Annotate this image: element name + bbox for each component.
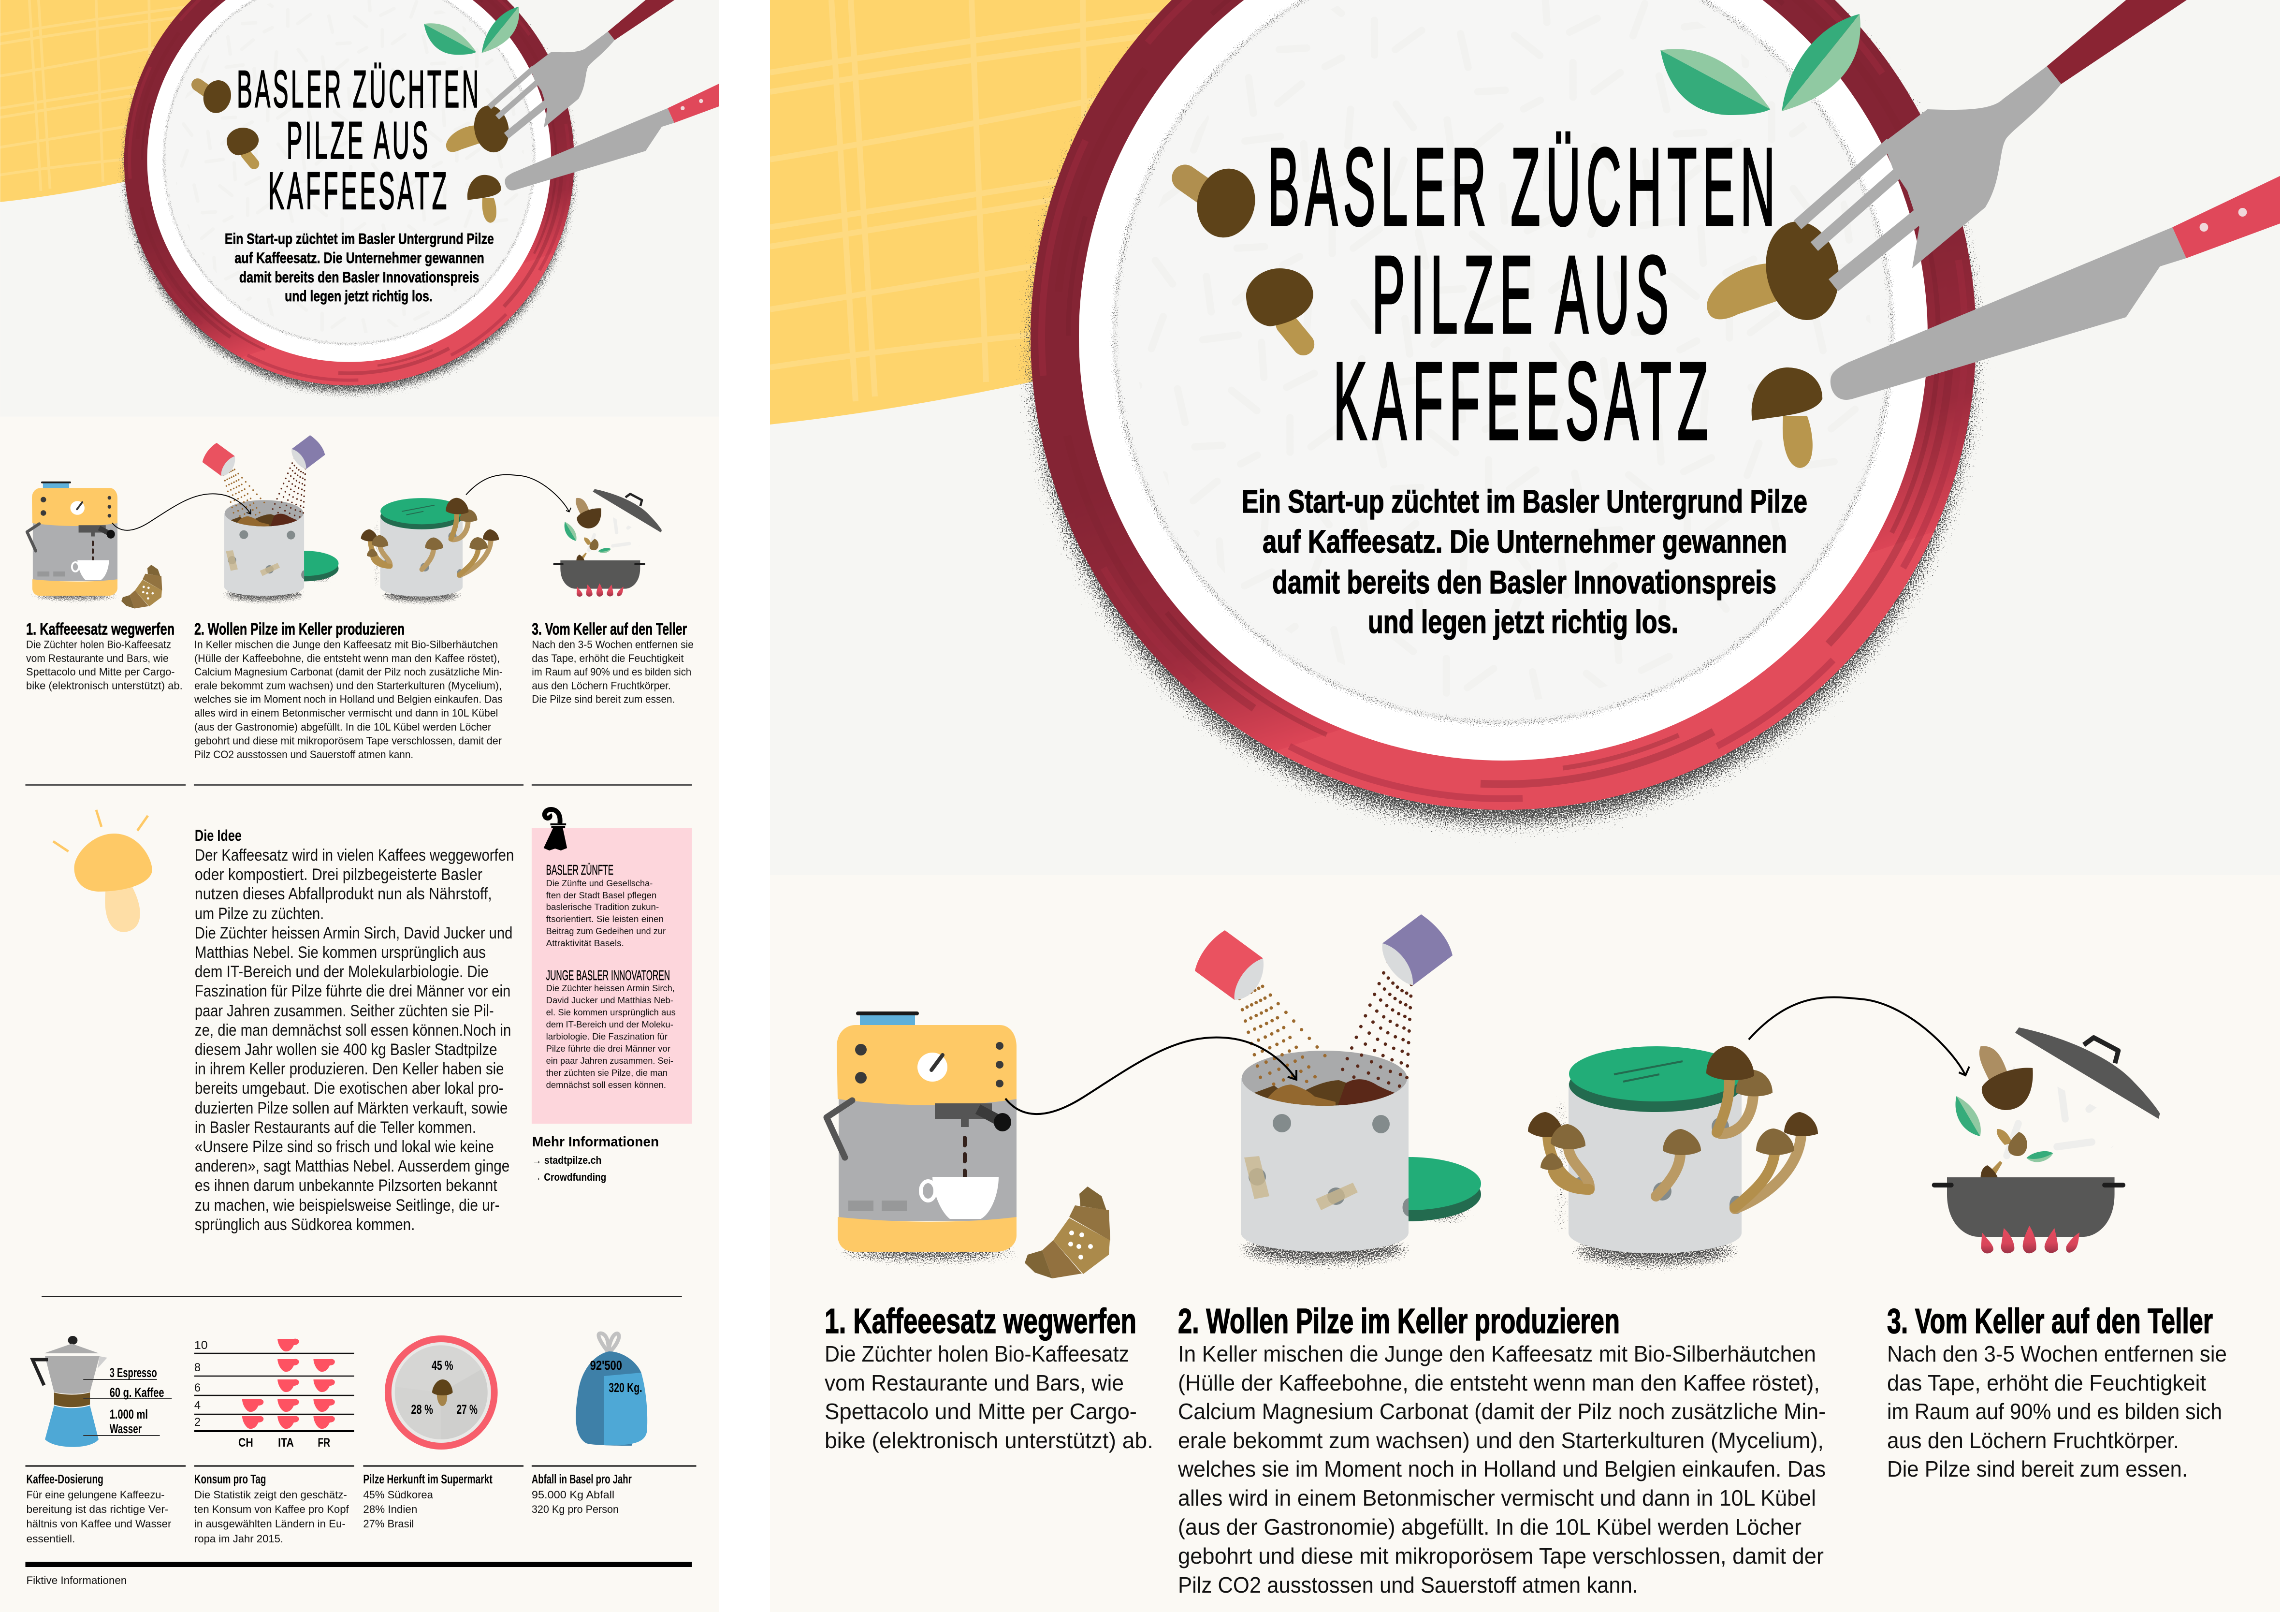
sidebar text: Junge Basler Innovatoren: ther züchten sie Pilze, die man (546, 1068, 668, 1078)
text block: Die Idee: anderen», sagt Matthias Nebel. Ausserdem ginge (195, 1157, 509, 1175)
text block: Die Idee: «Unsere Pilze sind so frisch und lokal wie keine (195, 1138, 494, 1156)
text block: Die Idee: nutzen dieses Abfallprodukt nun als Nährstoff, (195, 885, 492, 903)
statistics captions: ten Konsum von Kaffee pro Kopf (194, 1503, 349, 1515)
statistics captions: Konsum pro Tag (194, 1473, 266, 1486)
step 1 text: Spettacolo und Mitte per Cargo- (825, 1399, 1137, 1424)
step 2 text: In Keller mischen die Junge den Kaffeesatz mit Bio-Silberhäutchen (1178, 1341, 1816, 1366)
title (1267, 126, 1781, 463)
intro text: auf Kaffeesatz. Die Unternehmer gewannen (234, 249, 484, 266)
step 2 text: (Hülle der Kaffeebohne, die entsteht wenn man den Kaffee röstet), (1178, 1370, 1820, 1395)
links: Mehr Informationen: → Crowdfunding (532, 1171, 606, 1183)
text block: Die Idee: dem IT-Bereich und der Molekularbiologie. Die (195, 963, 489, 981)
sidebar text: Basler Zünfte: Beitrag zum Gedeihen und zur (546, 926, 666, 936)
illustration: coffee machine (827, 1011, 1027, 1267)
links: Mehr Informationen (532, 1134, 659, 1183)
panel: left process illustrations and steps (26, 435, 694, 761)
intro text: damit bereits den Basler Innovationspreis (1272, 564, 1776, 601)
panel: left process illustrations and steps: 2. Wollen Pilze im Keller produzieren (194, 620, 405, 638)
panel: left process illustrations and steps: Spettacolo und Mitte per Cargo- (26, 666, 175, 678)
sidebar text: Junge Basler Innovatoren: el. Sie kommen ursprünglich aus (546, 1007, 676, 1017)
statistics captions: 27% Brasil (363, 1518, 414, 1530)
panel: hero (770, 0, 2296, 875)
statistics captions: 95.000 Kg Abfall (532, 1489, 614, 1501)
panel: left lower sections (25, 784, 696, 1586)
sidebar text: Junge Basler Innovatoren: dem IT-Bereich und der Moleku- (546, 1019, 673, 1029)
step 2 text: Pilz CO2 ausstossen und Sauerstoff atmen kann. (1178, 1572, 1638, 1597)
links: Mehr Informationen: → stadtpilze.ch (532, 1154, 601, 1166)
illustration: poured packets (1195, 914, 1453, 1000)
panel: left hero: BASLER ZÜCHTEN (237, 59, 481, 118)
panel: pink sidebar (532, 809, 692, 1124)
text block: Die Idee: paar Jahren zusammen. Seither züchten sie Pil- (195, 1002, 494, 1020)
intro text: auf Kaffeesatz. Die Unternehmer gewannen (1263, 524, 1787, 560)
chart: coffee consumption per day: 4 (194, 1399, 201, 1412)
step 2 text: Calcium Magnesium Carbonat (damit der Pilz noch zusätzliche Min- (1178, 1399, 1826, 1424)
title: PILZE AUS (1372, 234, 1674, 356)
chart: mushroom origin plate: 27 % (456, 1402, 478, 1417)
step 1 text: bike (elektronisch unterstützt) ab. (825, 1428, 1153, 1453)
step 3 text: Nach den 3-5 Wochen entfernen sie (1887, 1341, 2227, 1366)
statistics captions: bereitung ist das richtige Ver- (26, 1503, 168, 1515)
text block: Die Idee: Der Kaffeesatz wird in vielen Kaffees weggeworfen (195, 846, 514, 865)
chart: coffee consumption per day: 2 (194, 1416, 201, 1429)
text block: Die Idee: um Pilze zu züchten. (195, 905, 324, 923)
divider rules under steps (25, 784, 692, 786)
panel: left process illustrations and steps: Die Züchter holen Bio-Kaffeesatz (26, 638, 171, 650)
panel: left process illustrations and steps: vom Restaurante und Bars, wie (26, 652, 169, 664)
statistics captions: 320 Kg pro Person (532, 1503, 619, 1515)
statistics captions: Pilze Herkunft im Supermarkt (363, 1473, 493, 1486)
text block: Die Idee: oder kompostiert. Drei pilzbegeisterte Basler (195, 865, 482, 884)
step 3 text: im Raum auf 90% und es bilden sich (1887, 1399, 2222, 1424)
icon: mushroom 4 (1752, 367, 1822, 468)
step 3 text: aus den Löchern Fruchtkörper. (1887, 1428, 2179, 1453)
chart: coffee consumption per day: 10 (194, 1339, 208, 1352)
panel: left process illustrations and steps: Nach den 3-5 Wochen entfernen sie (532, 638, 694, 650)
illustration: bucket with mushrooms (1528, 1046, 1818, 1272)
intro text: Ein Start-up züchtet im Basler Untergrund Pilze (225, 230, 494, 248)
statistics captions: essentiell. (26, 1533, 75, 1545)
chart: waste bag: 320 Kg. (609, 1380, 642, 1395)
chart: waste bag: 92'500 (590, 1358, 622, 1373)
chart: coffee consumption per day: 6 (194, 1381, 201, 1394)
statistics captions: Abfall in Basel pro Jahr (532, 1473, 632, 1486)
illustration: croissant (1025, 1187, 1110, 1278)
step 1 text: vom Restaurante und Bars, wie (825, 1370, 1124, 1395)
panel: left process illustrations and steps: das Tape, erhöht die Feuchtigkeit (532, 652, 683, 664)
text block: Die Idee: es ihnen darum unbekannte Pilzsorten bekannt (195, 1176, 497, 1195)
sidebar text: Junge Basler Innovatoren: demnächst soll essen können. (546, 1080, 666, 1090)
text block: Die Idee (195, 827, 514, 1234)
step 2 text: welches sie im Moment noch in Holland und Belgien einkaufen. Das (1177, 1456, 1826, 1481)
chart: moka pot dosage: 1.000 ml (110, 1407, 148, 1421)
step 1 text (825, 1302, 1153, 1453)
text block: Die Idee: Die Züchter heissen Armin Sirch, David Jucker und (195, 924, 512, 942)
chart: mushroom origin plate (385, 1335, 498, 1450)
panel: left page overview (0, 0, 729, 1612)
left page paper (0, 0, 719, 1612)
illustration: open bucket with coffee grounds (1233, 1051, 1481, 1270)
chart: coffee consumption per day: ITA (278, 1436, 294, 1450)
panel: left process illustrations and steps: (Hülle der Kaffeebohne, die entsteht wenn man den Kaffee röstet), (194, 652, 500, 664)
intro text: Ein Start-up züchtet im Basler Untergrund Pilze (1242, 484, 1807, 520)
plate (1020, 0, 1987, 836)
text block: Die Idee: Die Idee (195, 827, 242, 844)
icon: fork (1798, 0, 2187, 285)
sidebar text: Junge Basler Innovatoren: JUNGE BASLER INNOVATOREN (546, 968, 670, 983)
statistics captions: in ausgewählten Ländern in Eu- (194, 1518, 346, 1530)
chart: waste bag (576, 1334, 647, 1446)
statistics captions: Die Statistik zeigt den geschätz- (194, 1489, 347, 1501)
intro text (1242, 484, 1807, 640)
chart: moka pot dosage: Wasser (110, 1421, 142, 1436)
text block: Die Idee: diesem Jahr wollen sie 400 kg Basler Stadtpilze (195, 1040, 497, 1059)
chart: moka pot dosage: 60 g. Kaffee (110, 1385, 164, 1400)
step 3 text (1887, 1302, 2227, 1481)
intro text: damit bereits den Basler Innovationspreis (239, 268, 479, 286)
panel: right page detail (770, 0, 2296, 1612)
panel: left process illustrations and steps: In Keller mischen die Junge den Kaffeesatz mit Bio-Silberhäutchen (194, 638, 498, 650)
chart: mushroom origin plate: 45 % (432, 1358, 453, 1373)
step 2 text: gebohrt und diese mit mikroporösem Tape verschlossen, damit der (1178, 1543, 1824, 1568)
sidebar text: Junge Basler Innovatoren: Pilze führte die drei Männer vor (546, 1043, 670, 1054)
sidebar text: Junge Basler Innovatoren: Die Züchter heissen Armin Sirch, (546, 983, 675, 993)
icon: mushroom on fork (1707, 215, 1847, 327)
statistics captions: ropa im Jahr 2015. (194, 1533, 283, 1545)
step 2 text (1177, 1302, 1826, 1597)
chart: coffee consumption per day: 8 (194, 1361, 201, 1374)
statistics captions: hältnis von Kaffee und Wasser (26, 1518, 171, 1530)
sidebar text: Basler Zünfte: ftsorientiert. Sie leisten einen (546, 914, 664, 924)
text block: Die Idee: Faszination für Pilze führte die drei Männer vor ein (195, 982, 510, 1000)
chart: coffee consumption per day: CH (238, 1436, 253, 1450)
panel: left process illustrations and steps: Die Pilze sind bereit zum essen. (532, 693, 675, 705)
rule above statistics (42, 1296, 682, 1297)
step 1 text: 1. Kaffeeesatz wegwerfen (825, 1302, 1136, 1341)
right page paper (770, 0, 2280, 1612)
illustration: falling grains (1239, 962, 1411, 1093)
text block: Die Idee: in Basler Restaurants auf die Teller kommen. (195, 1118, 476, 1137)
sidebar text: Junge Basler Innovatoren: David Jucker und Matthias Neb- (546, 995, 673, 1005)
panel: left process illustrations and steps: im Raum auf 90% und es bilden sich (532, 666, 691, 678)
arrow: bucket to pot (1749, 997, 1969, 1075)
text block: Die Idee: in ihrem Keller produzieren. Den Keller haben sie (195, 1060, 504, 1078)
footer note: Fiktive Informationen (26, 1574, 127, 1586)
step 2 text: 2. Wollen Pilze im Keller produzieren (1178, 1302, 1620, 1341)
step 2 text: (aus der Gastronomie) abgefüllt. In die 10L Kübel werden Löcher (1178, 1514, 1802, 1539)
step 2 text: erale bekommt zum wachsen) und den Starterkulturen (Mycelium), (1178, 1428, 1824, 1453)
text block: Die Idee: ze, die man demnächst soll essen können.Noch in (195, 1021, 511, 1040)
sidebar text: Basler Zünfte: baslerische Tradition zukun- (546, 902, 659, 912)
chart: coffee consumption per day (194, 1339, 354, 1450)
text block: Die Idee: bereits umgebaut. Die exotischen aber lokal pro- (195, 1079, 503, 1098)
panel: left process illustrations and steps: (aus der Gastronomie) abgefüllt. In die 10L Kübel werden Löcher (194, 721, 491, 733)
icon: idea mushroom (53, 810, 152, 932)
sidebar text: Junge Basler Innovatoren: ein paar Jahren zusammen. Sei- (546, 1055, 673, 1066)
statistics captions: Für eine gelungene Kaffeezu- (26, 1489, 165, 1501)
thick footer bar (25, 1562, 692, 1567)
chart: moka pot dosage (32, 1336, 172, 1447)
intro text: und legen jetzt richtig los. (1368, 604, 1678, 640)
panel: left process illustrations and steps: Calcium Magnesium Carbonat (damit der Pilz noch zusätzliche Min- (194, 666, 503, 678)
sidebar text: Basler Zünfte: ften der Stadt Basel pflegen (546, 890, 656, 900)
statistics captions: 45% Südkorea (363, 1489, 434, 1501)
icon: knife (1831, 166, 2296, 400)
text block: Die Idee: sprünglich aus Südkorea kommen. (195, 1216, 415, 1234)
yellow table cloth (770, 0, 1208, 425)
panel: left process illustrations and steps: 1. Kaffeeesatz wegwerfen (26, 620, 174, 638)
panel: left process illustrations and steps: gebohrt und diese mit mikroporösem Tape verschlossen, damit der (194, 734, 502, 747)
step 1 text: Die Züchter holen Bio-Kaffeesatz (825, 1341, 1129, 1366)
panel: left process illustrations and steps: aus den Löchern Fruchtkörper. (532, 680, 671, 692)
text block: Die Idee: zu machen, wie beispielsweise Seitlinge, die ur- (195, 1196, 500, 1215)
sidebar text: Basler Zünfte: Attraktivität Basels. (546, 938, 624, 948)
chart: mushroom origin plate: 28 % (411, 1402, 433, 1417)
title: PILZE AUS (287, 111, 431, 169)
statistics captions (25, 1466, 696, 1545)
panel: left process illustrations and steps: welches sie im Moment noch in Holland und Belgien einkaufen. Das (194, 693, 503, 705)
text block: Die Idee: duzierten Pilze sollen auf Märkten verkauft, sowie (195, 1099, 508, 1117)
statistics captions: Kaffee-Dosierung (26, 1473, 103, 1486)
title: KAFFEESATZ (1333, 340, 1714, 463)
intro text: und legen jetzt richtig los. (285, 287, 433, 305)
sidebar text: Basler Zünfte: Die Zünfte und Gesellscha- (546, 878, 653, 888)
sidebar text: Basler Zünfte (546, 863, 666, 948)
title (239, 62, 477, 210)
title: KAFFEESATZ (268, 161, 450, 220)
sidebar text: Basler Zünfte: BASLER ZÜNFTE (546, 863, 613, 878)
icon: mushroom 1 (1185, 162, 1263, 244)
panel: left process illustrations and steps: alles wird in einem Betonmischer vermischt und dann in 10L Kübel (194, 707, 498, 719)
text block: Die Idee: Matthias Nebel. Sie kommen ursprünglich aus (195, 943, 486, 962)
chart: moka pot dosage: 3 Espresso (110, 1365, 157, 1380)
panel: left process illustrations and steps: 3. Vom Keller auf den Teller (532, 620, 687, 638)
icon: Basel staff (544, 809, 567, 850)
sidebar text: Junge Basler Innovatoren (546, 968, 676, 1090)
icon: leaves (1660, 14, 1860, 115)
chart: coffee consumption per day: FR (318, 1436, 330, 1450)
panel: left hero (0, 0, 729, 417)
panel: left process illustrations and steps: Pilz CO2 ausstossen und Sauerstoff atmen kann. (194, 748, 413, 761)
intro text (225, 230, 494, 305)
arrow: machine to bucket (1005, 1038, 1296, 1114)
step 2 text: alles wird in einem Betonmischer vermischt und dann in 10L Kübel (1178, 1485, 1816, 1510)
step 3 text: Die Pilze sind bereit zum essen. (1887, 1456, 2188, 1481)
sidebar text: Junge Basler Innovatoren: larbiologie. Die Faszination für (546, 1031, 668, 1041)
panel: left process illustrations and steps: erale bekommt zum wachsen) und den Starterkulturen (Mycelium), (194, 680, 502, 692)
step 3 text: das Tape, erhöht die Feuchtigkeit (1887, 1370, 2206, 1395)
panel: left process illustrations and steps: bike (elektronisch unterstützt) ab. (26, 680, 183, 692)
illustration: cooking pot (1932, 1027, 2160, 1253)
icon: mushroom 2 (1246, 268, 1313, 344)
links: Mehr Informationen: Mehr Informationen (532, 1134, 659, 1150)
statistics captions: 28% Indien (363, 1503, 417, 1515)
